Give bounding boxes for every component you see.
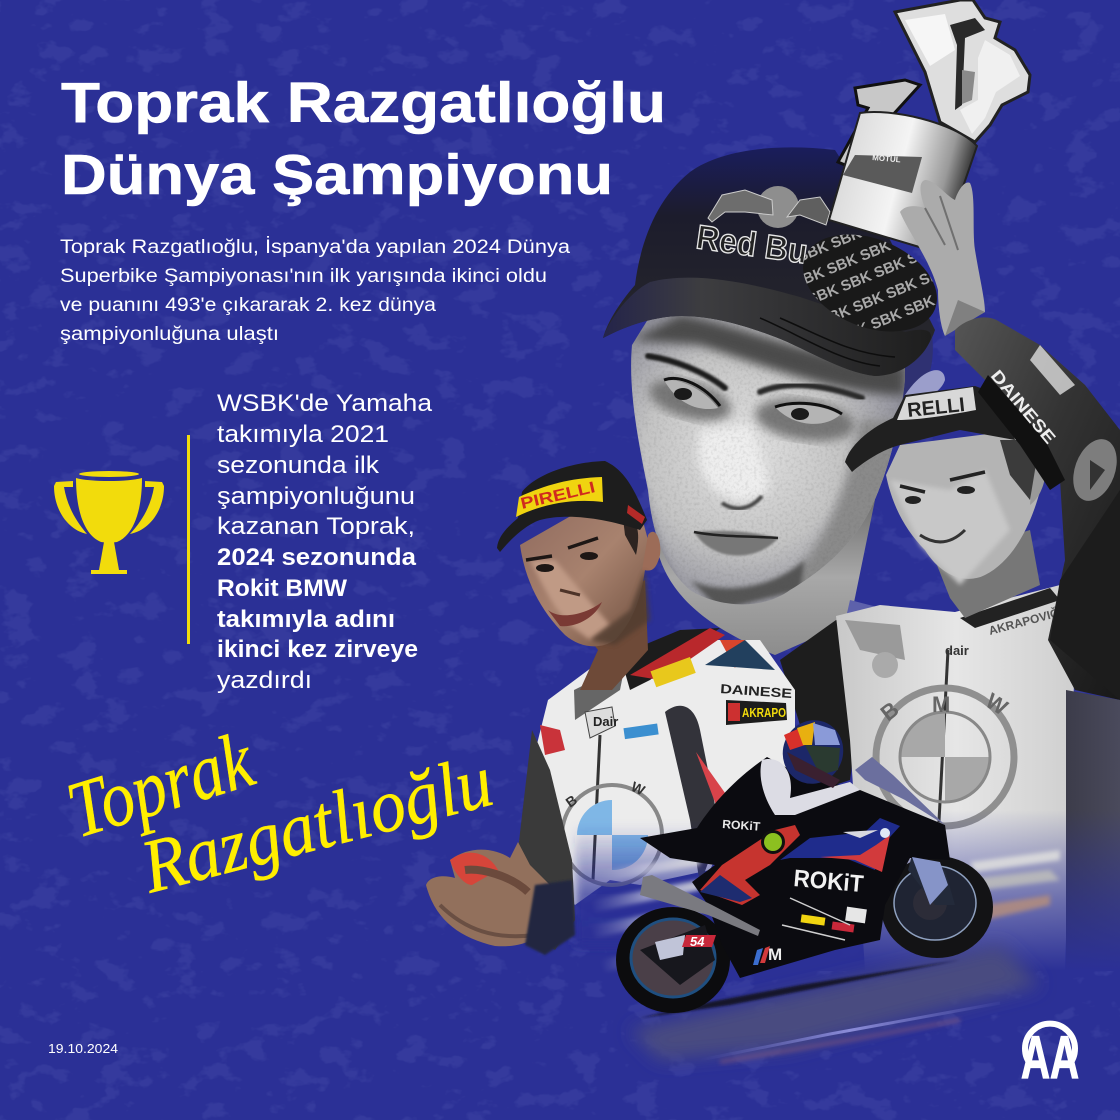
- motorcycle: sponsor decals: M: [768, 945, 782, 964]
- large portrait: cap with Red Bull logo: Red Bu: [694, 218, 810, 272]
- AA agency logo: [1021, 1024, 1079, 1091]
- left portrait: face: [520, 505, 660, 646]
- right portrait: torso and suit: AKRAPOVIČ: [987, 605, 1061, 638]
- large portrait: hair and ear: [880, 335, 945, 420]
- intro paragraph: şampiyonluğuna ulaştı: [60, 324, 279, 345]
- motorcycle: red and blue livery: [780, 818, 948, 905]
- motorcycle: [616, 712, 993, 1013]
- championship text block: 2024 sezonunda: [217, 544, 417, 571]
- intro paragraph: Superbike Şampiyonası'nın ilk yarışında ikinci oldu: [60, 266, 547, 287]
- left portrait: Dainese and Akrapovic badges: DAINESE: [720, 681, 793, 701]
- intro paragraph: ve puanını 493'e çıkararak 2. kez dünya: [60, 295, 436, 316]
- raised hand holding trophy: [900, 180, 985, 336]
- large portrait: neck: [655, 500, 875, 655]
- right portrait: cap: [845, 386, 1015, 472]
- rider: leg: [700, 825, 800, 905]
- large portrait: collar shoulder: [845, 600, 935, 640]
- left portrait: suit: [518, 628, 795, 905]
- motorcycle: Rokit lettering: ROKiT: [792, 865, 865, 898]
- signature: Toprak: [58, 716, 264, 855]
- title: Dünya Şampiyonu: [61, 143, 613, 207]
- left portrait: collar and chest details: [540, 628, 775, 880]
- intro paragraph: Toprak Razgatlıoğlu, İspanya'da yapılan 2024 Dünya: [60, 237, 570, 258]
- AA agency logo: AA: [1021, 1024, 1079, 1091]
- motorcycle shadow: [640, 960, 960, 1018]
- road surface: [630, 945, 1040, 1062]
- championship text block: takımıyla 2021: [217, 421, 389, 448]
- trophy: SBK base disc: [803, 234, 937, 332]
- left portrait: BMW roundel: B: [563, 792, 580, 810]
- trophy: SBK base disc: SBK SBK SBK SBK SBK: [835, 265, 1004, 347]
- motorcycle: exhaust: [640, 875, 760, 936]
- trophy: label plate: [843, 153, 922, 193]
- left portrait: dark inner sleeve: [665, 706, 720, 885]
- right portrait: cap: RELLI: [906, 394, 966, 422]
- championship text block: yazdırdı: [217, 667, 312, 694]
- right portrait: torso and suit: W: [981, 688, 1012, 720]
- trophy: SBK base disc: SBK SBK SBK SBK SBK: [795, 184, 964, 266]
- fade over left figure: [575, 825, 815, 945]
- motion streaks behind motorcycle: [590, 850, 1060, 972]
- right portrait: torso and suit: B: [876, 696, 904, 726]
- right portrait: torso and suit: [780, 565, 1075, 970]
- motorcycle: main body mass: [640, 757, 950, 978]
- left portrait: BMW roundel: [562, 778, 662, 885]
- icon: yellow trophy: [54, 471, 164, 574]
- left portrait: BMW roundel: W: [629, 778, 648, 799]
- championship text block: kazanan Toprak,: [217, 513, 415, 540]
- motorcycle: number 54 plate: [682, 934, 716, 949]
- large portrait: cap with Red Bull logo: [603, 147, 935, 376]
- right portrait: torso and suit: dair: [945, 643, 969, 658]
- rider: helmet: [774, 712, 852, 792]
- trophy: SBK base disc: SBK SBK SBK SBK SBK: [817, 248, 986, 330]
- left portrait: Dainese and Akrapovic badges: [720, 681, 793, 725]
- trophy: SBK base disc: SBK SBK SBK SBK SBK: [791, 210, 960, 292]
- championship text block: WSBK'de Yamaha: [217, 390, 433, 417]
- trophy: SBK base disc: SBK SBK SBK SBK SBK: [805, 227, 974, 309]
- title: Toprak Razgatlıoğlu: [61, 71, 666, 135]
- championship text block: takımıyla adını: [217, 606, 395, 633]
- left portrait: Dainese and Akrapovic badges: AKRAPO: [742, 705, 786, 720]
- rider: knee slider: [761, 830, 785, 854]
- motorcycle: number 54 plate: 54: [690, 934, 705, 949]
- trophy: label plate: MOTUL: [872, 153, 901, 164]
- date: 19.10.2024: [48, 1042, 118, 1056]
- right portrait: raised arm with suit sleeve: [955, 317, 1120, 970]
- rider: boot: [700, 875, 752, 902]
- championship text block: sezonunda ilk: [217, 452, 380, 479]
- championship text block: şampiyonluğunu: [217, 483, 415, 510]
- trophy: silver circuit top: [895, 0, 1030, 142]
- left portrait: clapping hands: [426, 842, 575, 955]
- large portrait: face: [631, 316, 905, 604]
- rider: arm: [761, 759, 860, 815]
- right portrait: torso and suit: M: [932, 692, 950, 717]
- intro paragraph: [60, 237, 570, 345]
- title: [61, 71, 666, 207]
- motorcycle: rear wheel: [616, 907, 730, 1013]
- left portrait: Pirelli cap: PIRELLI: [519, 479, 597, 513]
- left portrait: Pirelli cap: [497, 461, 647, 552]
- trophy: [829, 0, 1030, 252]
- motorcycle: windscreen: [855, 757, 945, 825]
- left portrait: dark left sleeve: [518, 730, 575, 950]
- championship text block: [217, 390, 433, 694]
- motorcycle: sponsor decals: [753, 898, 867, 965]
- signature: Razgatlıoğlu: [132, 738, 501, 910]
- fade over right figures: [800, 810, 1120, 971]
- trophy: number seven plate: [838, 80, 920, 168]
- right portrait: neck and face: [886, 430, 1046, 618]
- left portrait: collar and chest details: Dair: [593, 714, 618, 729]
- motorcycle: front wheel: [881, 855, 993, 958]
- vertical divider bar: [187, 435, 190, 644]
- trophy: cylinder: [829, 112, 977, 252]
- championship text block: Rokit BMW: [217, 575, 347, 602]
- championship text block: ikinci kez zirveye: [217, 636, 418, 663]
- left portrait: neck: [576, 580, 648, 690]
- right portrait: raised arm with suit sleeve: DAINESE: [987, 366, 1059, 448]
- motorcycle: ROKiT: [722, 817, 761, 834]
